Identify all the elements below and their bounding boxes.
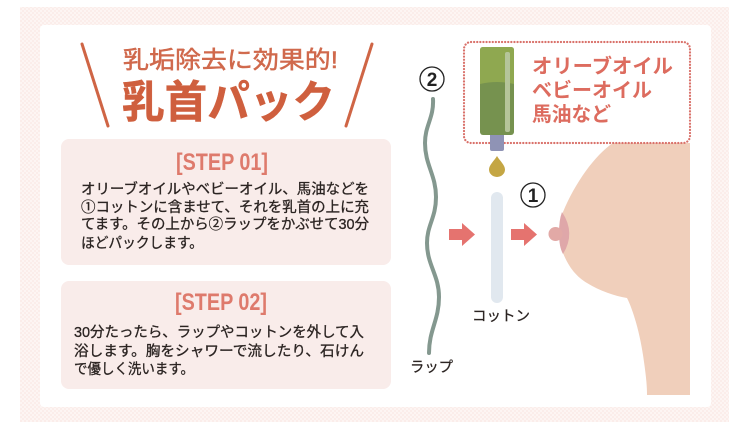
callout: oil types xyxy=(464,42,690,143)
step 01 heading: [STEP 01] xyxy=(176,149,268,176)
number 1 badge: 1 xyxy=(528,186,539,207)
step 01 body text: てます。その上から②ラップをかぶせて30分 xyxy=(81,216,369,233)
step 01 body text: ①コットンに含ませて、それを乳首の上に充 xyxy=(81,199,369,216)
step 01 body text xyxy=(81,180,369,252)
callout text: オリーブオイル xyxy=(532,54,673,78)
number 2 badge xyxy=(420,67,444,91)
nipple xyxy=(548,227,562,241)
callout text: 馬油など xyxy=(532,103,611,126)
step 01 body text: ほどパックします。 xyxy=(81,235,203,252)
label: cotton: コットン xyxy=(472,309,530,325)
title main heading: 乳首パック xyxy=(122,78,335,127)
label: wrap: ラップ xyxy=(410,359,453,376)
step 01 body text: オリーブオイルやベビーオイル、馬油などを xyxy=(81,180,369,198)
step 02 body text xyxy=(74,324,364,378)
panel: step 02 xyxy=(61,281,391,389)
callout text: ベビーオイル xyxy=(532,79,652,102)
plastic wrap xyxy=(425,99,439,353)
icon: oil bottle xyxy=(480,47,514,151)
breast illustration xyxy=(548,143,690,395)
step 02 body text: で優しく洗います。 xyxy=(74,361,194,378)
number 1 badge xyxy=(521,183,545,207)
arrow: cotton to nipple xyxy=(511,223,537,246)
step 02 heading: [STEP 02] xyxy=(175,289,267,316)
icon: oil drop xyxy=(489,156,505,177)
arrow: wrap to cotton xyxy=(449,223,475,246)
cotton xyxy=(491,192,503,303)
right slash xyxy=(346,44,372,126)
left slash xyxy=(82,44,108,126)
step 02 body text: 浴します。胸をシャワーで流したり、石けん xyxy=(74,343,364,360)
areola xyxy=(559,212,569,254)
title subheading: 乳垢除去に効果的! xyxy=(123,47,338,74)
callout text xyxy=(532,54,673,126)
number 2 badge: 2 xyxy=(427,70,437,91)
title xyxy=(82,44,372,127)
step 02 body text: 30分たったら、ラップやコットンを外して入 xyxy=(74,324,364,341)
panel: step 01 xyxy=(61,139,391,265)
